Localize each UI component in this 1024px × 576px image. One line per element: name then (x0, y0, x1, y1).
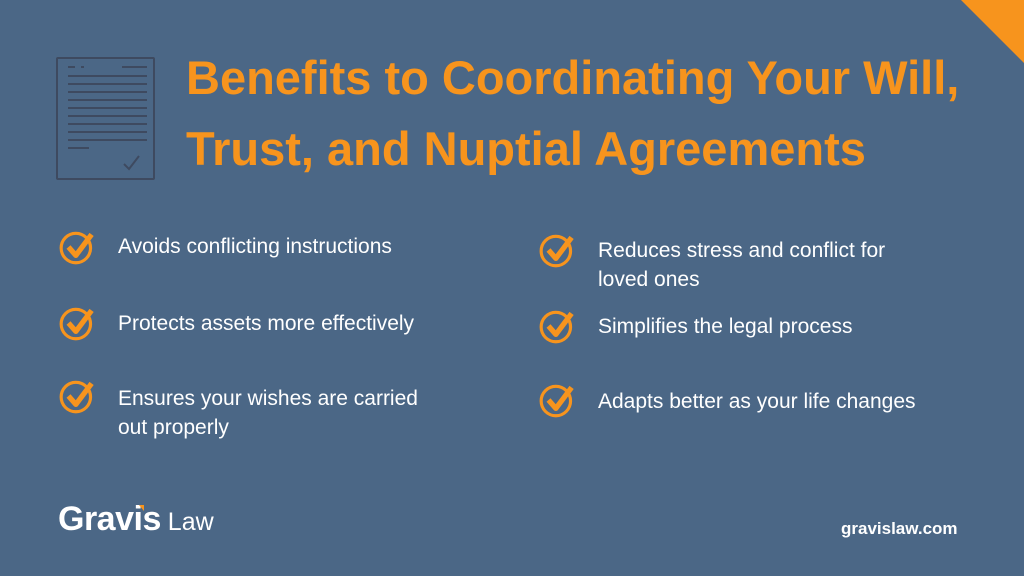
item 3 (60, 380, 418, 439)
title: Trust, and Nuptial Agreements (186, 122, 866, 175)
title: Benefits to Coordinating Your Will, (186, 51, 959, 104)
left list: Avoids conflicting instructions (118, 235, 392, 258)
icon: document (56, 57, 155, 180)
item 1 (60, 232, 392, 264)
left list: out properly (118, 416, 229, 439)
right list: Simplifies the legal process (598, 315, 852, 338)
title (186, 51, 959, 175)
right list (540, 234, 916, 418)
corner triangle (961, 0, 1024, 63)
right list: Adapts better as your life changes (598, 390, 916, 413)
left list: Ensures your wishes are carried (118, 387, 418, 410)
item 6 (540, 384, 916, 418)
item 4 (540, 234, 885, 291)
left list (60, 232, 418, 439)
logo: Gravis Law (58, 500, 214, 538)
website: gravislaw.com (841, 519, 958, 538)
left list: Protects assets more effectively (118, 312, 414, 335)
item 2 (60, 308, 414, 340)
right list: loved ones (598, 268, 700, 291)
item 5 (540, 310, 852, 344)
right list: Reduces stress and conflict for (598, 239, 885, 262)
